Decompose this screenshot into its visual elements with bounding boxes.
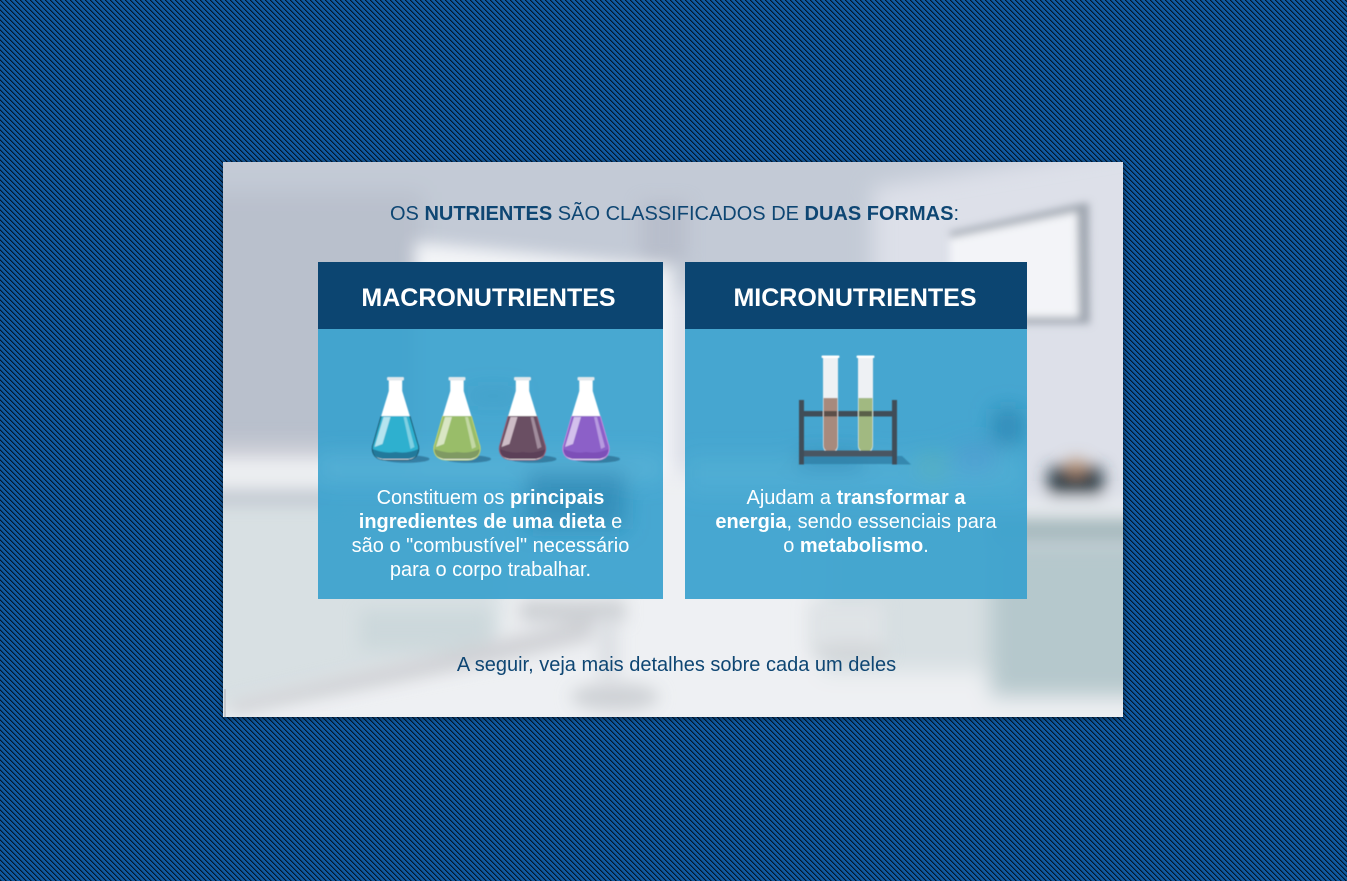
icon: brown tube <box>822 356 840 452</box>
footer text: A seguir, veja mais detalhes sobre cada um deles <box>457 654 896 676</box>
icon: purple flask <box>563 377 620 463</box>
panel text <box>715 487 997 557</box>
panel heading: MACRONUTRIENTES <box>361 284 616 312</box>
heading: OS NUTRIENTES SÃO CLASSIFICADOS DE DUAS FORMAS: <box>390 203 959 225</box>
panel heading <box>318 262 663 329</box>
panel: micronutrientes <box>685 262 1027 599</box>
panel text: o metabolismo. <box>783 535 929 557</box>
panel: main card <box>223 162 1123 717</box>
panel heading: MICRONUTRIENTES <box>733 284 977 312</box>
icon: blue flask <box>372 377 430 463</box>
panel heading <box>685 262 1027 329</box>
panel text: Constituem os principais <box>377 487 604 509</box>
panel text: para o corpo trabalhar. <box>390 559 591 581</box>
icon: maroon flask <box>499 377 556 463</box>
panel text: energia, sendo essenciais para <box>715 511 997 533</box>
panel text: ingredientes de uma dieta e <box>359 511 622 533</box>
panel: macronutrientes <box>318 262 663 599</box>
icon: green flask <box>434 377 491 463</box>
panel text: Ajudam a transformar a <box>746 487 966 509</box>
panel text: são o "combustível" necessário <box>352 535 629 557</box>
icon: test tube rack <box>799 356 911 464</box>
panel text <box>352 487 629 581</box>
icon: green tube <box>856 356 874 452</box>
icon: flasks <box>372 377 620 463</box>
